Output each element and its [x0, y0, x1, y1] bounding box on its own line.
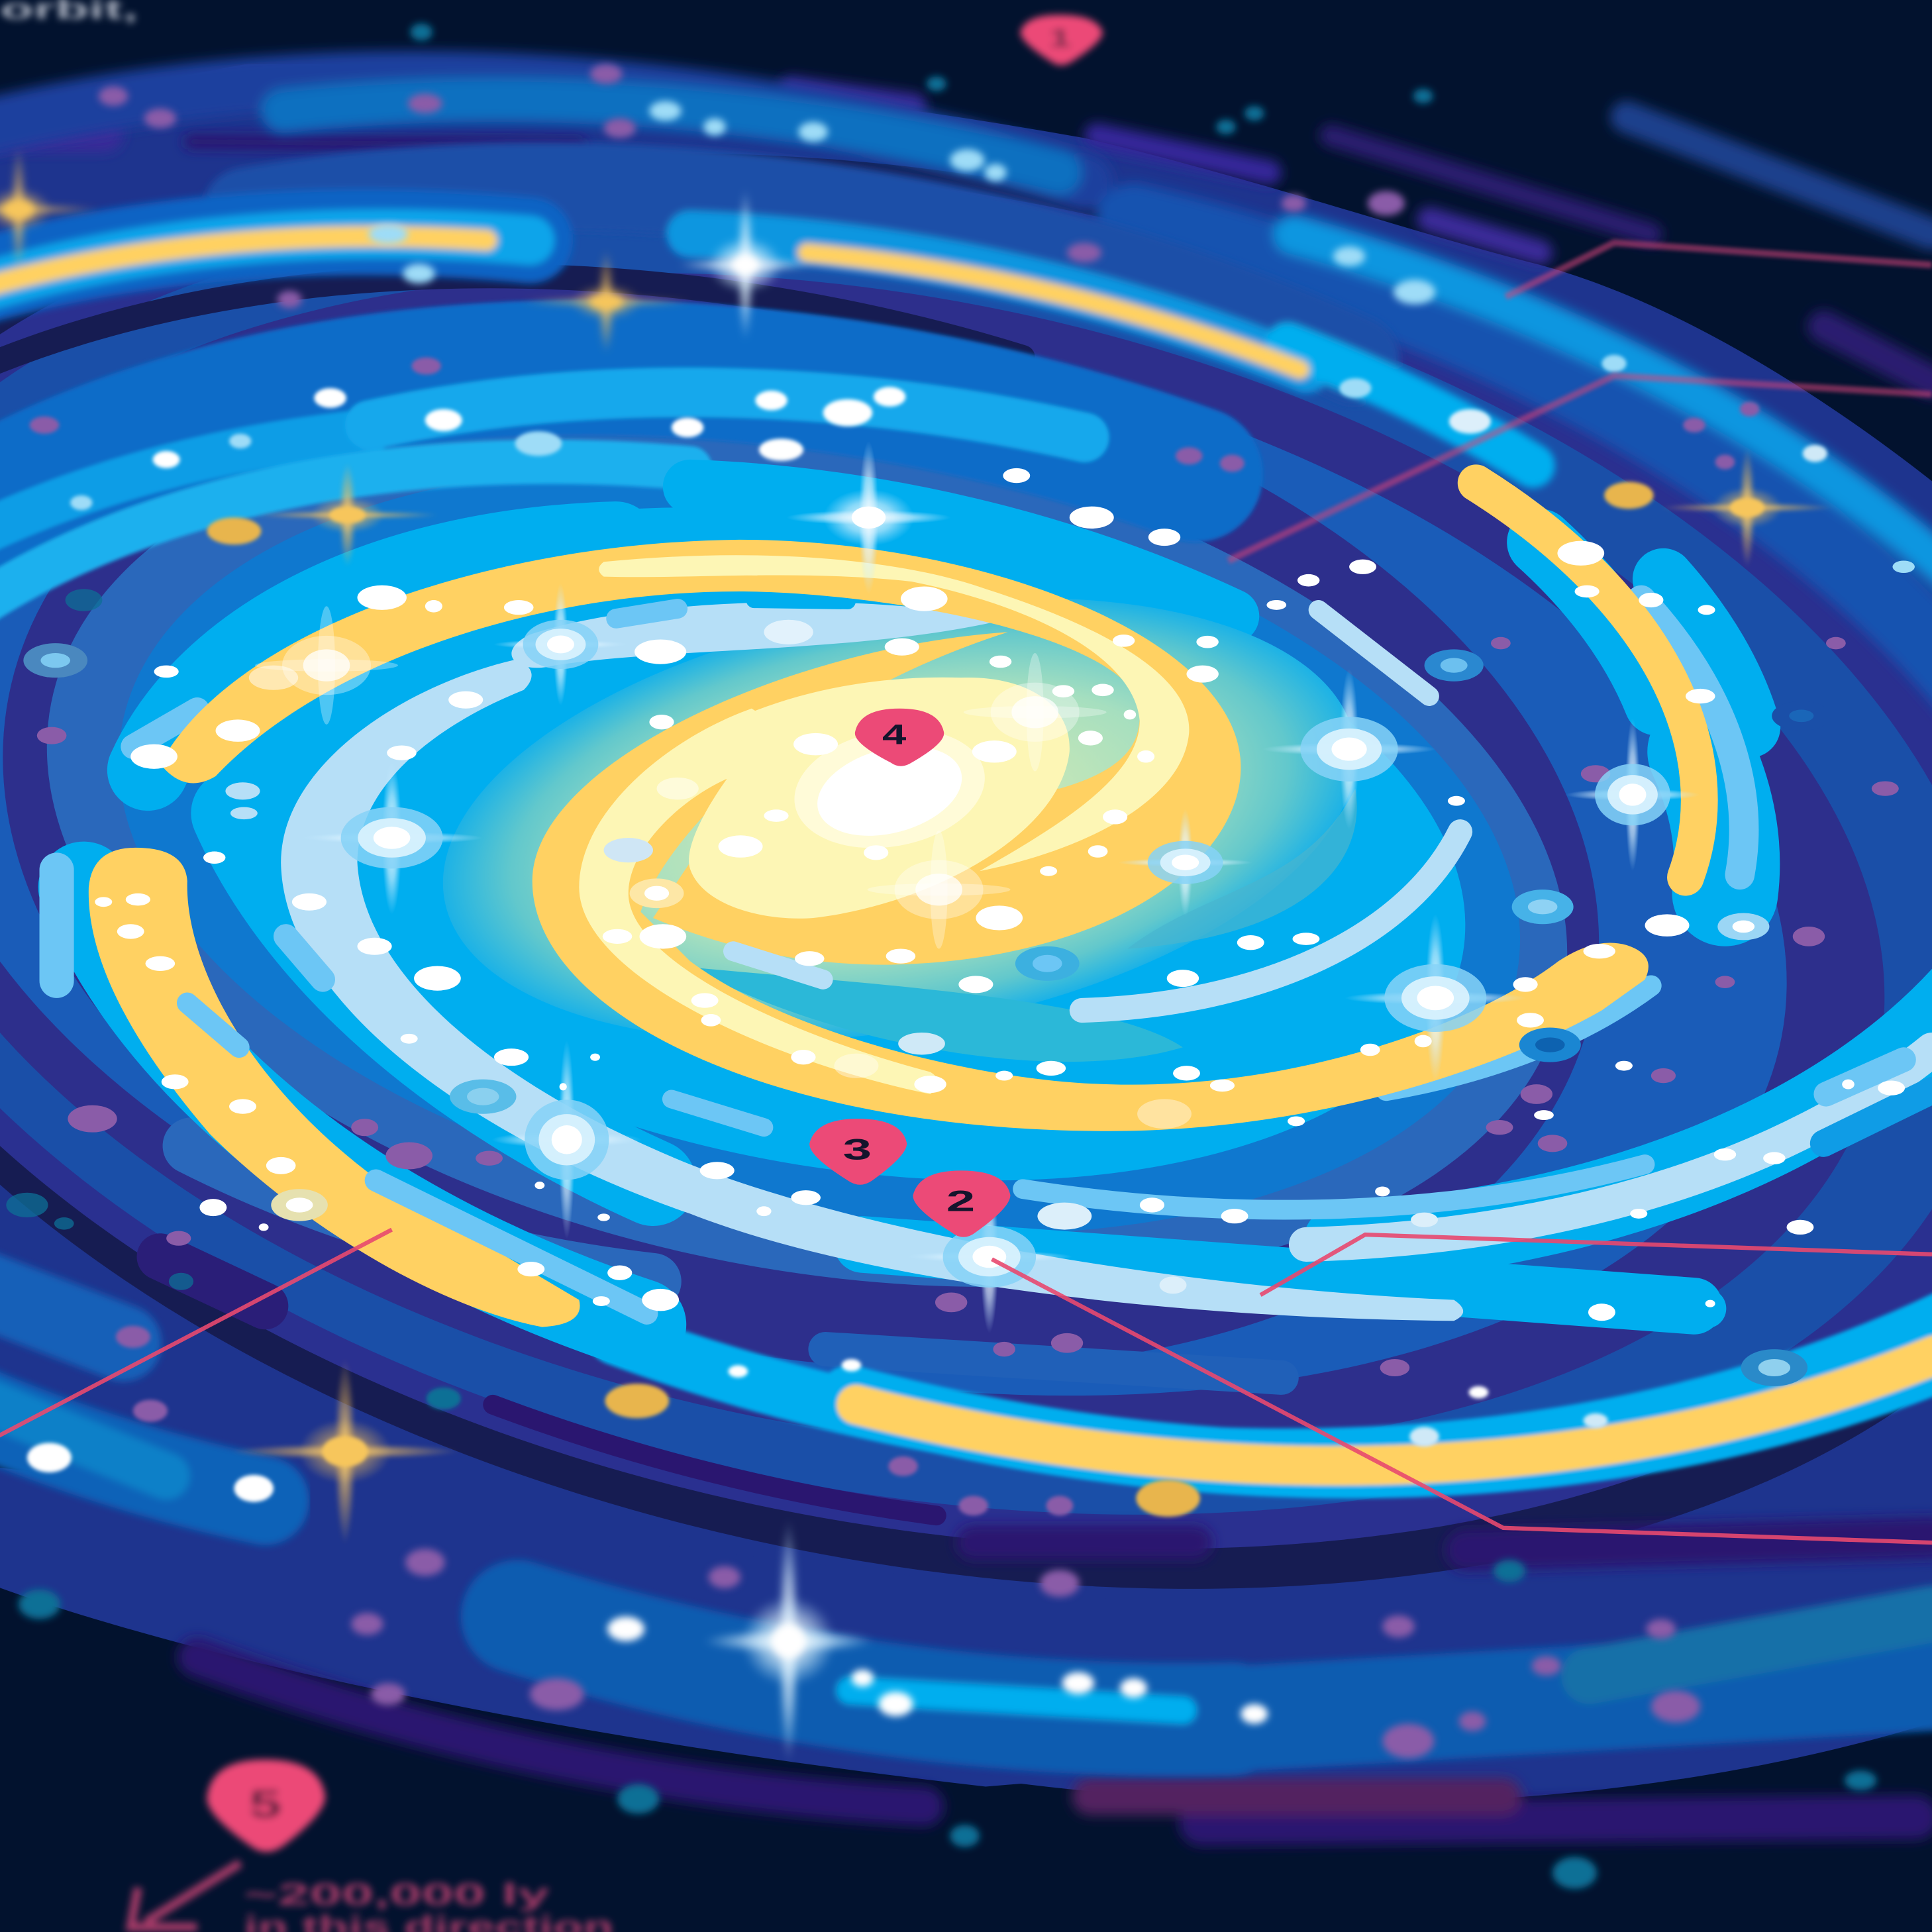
- lower yellow band with halo: [616, 1306, 1932, 1466]
- far outer streaks top: [0, 89, 1932, 382]
- pin 5: 5: [249, 1782, 281, 1826]
- far blue bands top: [0, 79, 1932, 690]
- far stars top: [0, 23, 1435, 354]
- pin 3: 3: [842, 1134, 872, 1166]
- teal dim stars: [6, 589, 193, 1290]
- pin 5: [207, 1760, 325, 1852]
- direction arrow: [130, 1863, 240, 1927]
- pin 2: 2: [946, 1186, 975, 1217]
- second ring bands: [0, 187, 1533, 466]
- mid distance stars bottom: [27, 1326, 1608, 1544]
- pin 2: [913, 1170, 1010, 1237]
- far blue bands bottom: [517, 1614, 1932, 1719]
- pin 4: [855, 709, 944, 766]
- flare stars: [255, 441, 1700, 1333]
- pale blue spiral arm: [281, 600, 1463, 1321]
- teal bulge glow: [408, 533, 1391, 1106]
- central spiral arms: [160, 540, 1649, 1131]
- lower pink leader lines: [0, 1230, 1932, 1543]
- lower left lobes: [0, 1282, 265, 1501]
- yellow outer arcs: [57, 483, 1932, 1327]
- pin 3: [809, 1119, 907, 1185]
- distance note: ~200,000 ly: [244, 1877, 550, 1911]
- distance note: [244, 1877, 613, 1932]
- mauve and dim stars: [37, 637, 1899, 1376]
- white stars: [95, 468, 1915, 1321]
- third ring bands: [0, 368, 1195, 616]
- mid distance stars top: [30, 355, 1834, 567]
- purple patches: [0, 276, 1023, 1515]
- pin 1: [1020, 15, 1103, 66]
- galactic core: [785, 715, 994, 862]
- pin 4: 4: [882, 719, 907, 750]
- outer blue spiral bands: [690, 487, 1932, 1378]
- upper pink leader lines: [1229, 242, 1932, 560]
- left spiral arm halo: [84, 542, 1694, 1325]
- ring stars: [23, 643, 1831, 1386]
- pin 1: 1: [1048, 24, 1072, 52]
- far outer streaks bottom: [197, 1538, 1932, 1823]
- far stars bottom: [19, 1519, 1876, 1889]
